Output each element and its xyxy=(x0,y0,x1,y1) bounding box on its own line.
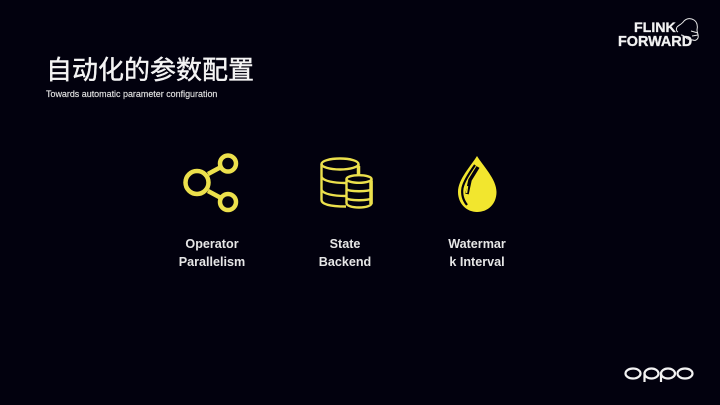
subtitle: Towards automatic parameter configuration xyxy=(46,89,217,99)
icon: squirrel outline xyxy=(676,18,699,41)
label: Operator Parallelism xyxy=(179,237,245,269)
label: Watermark Interval: Watermar xyxy=(448,237,506,251)
label: State Backend: State xyxy=(330,237,360,251)
logo text: Flink: FLINK xyxy=(634,20,676,36)
label: Watermark Interval: k Interval xyxy=(449,255,505,269)
label: Operator Parallelism: Operator xyxy=(185,237,239,251)
title: 自动化的参数配置 xyxy=(46,55,254,85)
label: State Backend xyxy=(319,237,371,269)
logo: Flink Forward xyxy=(618,18,699,50)
logo text: Forward: FORWARD xyxy=(618,34,692,50)
label: Operator Parallelism: Parallelism xyxy=(179,255,245,269)
label: Watermark Interval xyxy=(448,237,506,269)
label: State Backend: Backend xyxy=(319,255,371,269)
